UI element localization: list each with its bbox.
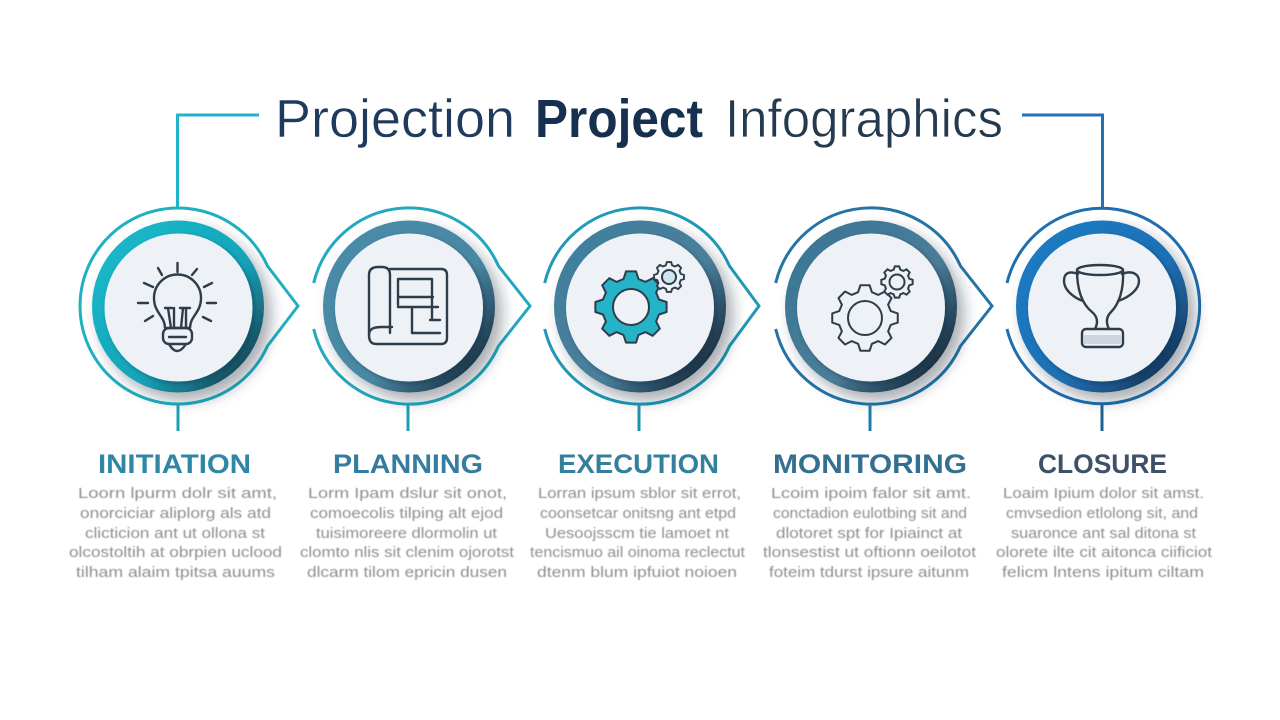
- description: [530, 485, 746, 581]
- panel: execution: [530, 208, 759, 581]
- gradient ring: [554, 220, 726, 392]
- description: tlonsestist ut oftionn oeilotot: [763, 544, 977, 561]
- description: Lcoim ipoim falor sit amt.: [771, 485, 971, 502]
- description: Loaim Ipium dolor sit amst.: [1003, 485, 1204, 502]
- inner disc: [104, 234, 252, 382]
- title: Project: [535, 89, 703, 149]
- stem: [406, 404, 410, 431]
- description: coonsetcar onitsng ant etpd: [540, 505, 736, 522]
- description: felicm lntens ipitum ciltam: [1002, 564, 1204, 581]
- inner disc: [566, 234, 714, 382]
- stem: [638, 404, 640, 431]
- left title connector: [178, 115, 259, 208]
- title: Infographics: [725, 89, 1003, 149]
- outer arrow ring: [545, 208, 759, 404]
- icon: filled gears: [595, 262, 684, 343]
- heading: MONITORING: [773, 449, 967, 479]
- inner disc: [335, 234, 483, 382]
- icon: trophy: [1064, 265, 1139, 347]
- icon: light bulb: [138, 263, 216, 351]
- heading: EXECUTION: [558, 449, 719, 479]
- gradient ring: [92, 220, 264, 392]
- description: conctadion eulotbing sit and: [773, 505, 967, 522]
- heading: PLANNING: [333, 449, 483, 479]
- description: [300, 485, 515, 581]
- outer arrow ring: [776, 208, 992, 404]
- description: Loorn lpurm dolr sit amt,: [78, 485, 277, 502]
- outer arrow ring: [314, 208, 530, 404]
- title: [275, 89, 1003, 149]
- gradient ring: [1016, 220, 1188, 392]
- right title connector: [1022, 115, 1102, 208]
- description: Lorm Ipam dslur sit onot,: [308, 485, 507, 502]
- description: olorete ilte cit aitonca ciificiot: [996, 544, 1213, 561]
- description: olcostoltih at obrpien uclood: [69, 544, 282, 561]
- gradient ring: [785, 220, 957, 392]
- panel: initiation: [69, 208, 298, 581]
- description: Lorran ipsum sblor sit errot,: [538, 485, 741, 502]
- outer ring: [1007, 208, 1200, 404]
- heading: INITIATION: [98, 449, 251, 479]
- stem: [1100, 404, 1104, 431]
- description: [996, 485, 1213, 581]
- description: clicticion ant ut ollona st: [85, 525, 266, 542]
- description: dlcarm tilom epricin dusen: [307, 564, 507, 581]
- description: suaronce ant sal ditona st: [1011, 525, 1197, 542]
- stem: [868, 404, 872, 431]
- description: dtenm blum ipfuiot noioen: [537, 564, 737, 581]
- description: foteim tdurst ipsure aitunm: [769, 564, 969, 581]
- description: clomto nlis sit clenim ojorotst: [300, 544, 515, 561]
- description: onorciciar aliplorg als atd: [80, 505, 271, 522]
- description: comoecolis tilping alt ejod: [310, 505, 503, 522]
- title: Projection: [275, 89, 515, 149]
- gradient ring: [323, 220, 495, 392]
- panel: planning: [300, 208, 530, 581]
- description: tencismuo ail oinoma reclectut: [530, 544, 746, 561]
- description: [69, 485, 282, 581]
- description: Uesoojsscm tie lamoet nt: [545, 525, 730, 542]
- description: cmvsedion etlolong sit, and: [1006, 505, 1198, 522]
- icon: outline gears: [832, 266, 913, 351]
- heading: CLOSURE: [1038, 449, 1167, 479]
- panel: closure: [996, 208, 1213, 581]
- description: tuisimoreere dlormolin ut: [316, 525, 498, 542]
- description: tilham alaim tpitsa auums: [76, 564, 275, 581]
- stem: [176, 404, 180, 431]
- description: dlotoret spt for Ipiainct at: [776, 525, 963, 542]
- panel: monitoring: [763, 208, 992, 581]
- inner disc: [1028, 234, 1176, 382]
- description: [763, 485, 977, 581]
- inner disc: [797, 234, 945, 382]
- icon: blueprint: [369, 267, 447, 344]
- outer arrow ring: [80, 208, 298, 404]
